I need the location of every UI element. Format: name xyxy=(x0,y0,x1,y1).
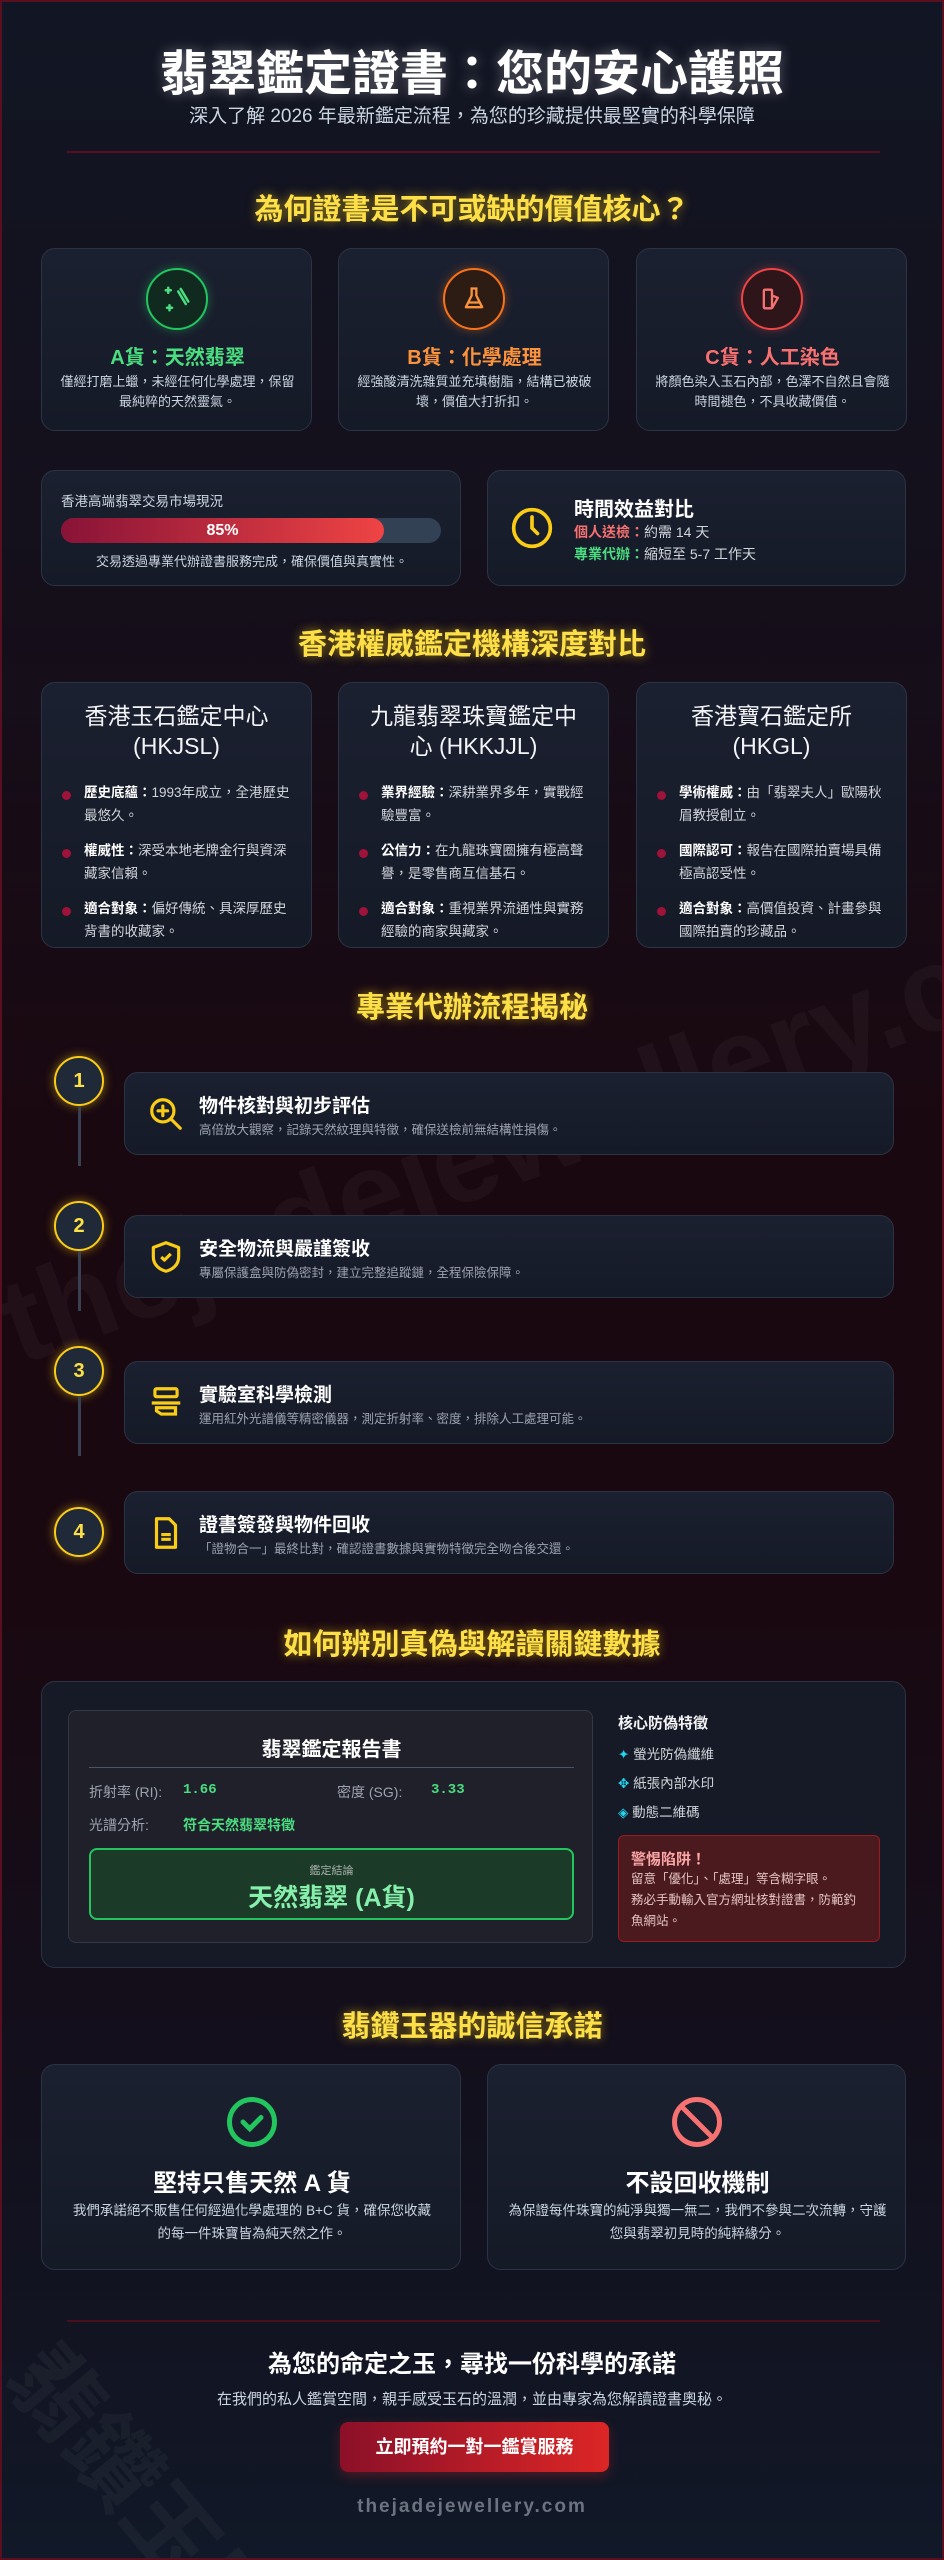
report mockup: 1.66 xyxy=(183,1782,217,1798)
panel: HKJSL: 權威性：深受本地老牌金行與資深藏家信賴。 xyxy=(84,843,286,881)
step 4: 「證物合一」最終比對，確認證書數據與實物特徵完全吻合後交還。 xyxy=(199,1542,574,1556)
CTA button xyxy=(340,2422,609,2472)
panel: time comparison: 時間效益對比 xyxy=(574,499,694,521)
panel: verification xyxy=(41,1681,906,1968)
panel: no buyback: 不設回收機制 xyxy=(626,2170,770,2197)
warning callout: 務必手動輸入官方網址核對證書，防範釣魚網站。 xyxy=(631,1893,856,1928)
panel: A grade xyxy=(41,248,312,431)
step 4: 證書簽發與物件回收 xyxy=(199,1515,370,1536)
icon: flask xyxy=(443,268,505,330)
panel: HKGL: 國際認可：報告在國際拍賣場具備極高認受性。 xyxy=(679,843,882,881)
security features: ✦ 螢光防偽纖維 xyxy=(618,1747,714,1762)
panel: market bar: 香港高端翡翠交易市場現況 xyxy=(61,494,223,509)
panel: HKGL: 適合對象：高價值投資、計畫參與國際拍賣的珍藏品。 xyxy=(679,901,882,939)
panel: C grade: 將顏色染入玉石內部，色澤不自然且會隨時間褪色，不具收藏價值。 xyxy=(655,374,890,409)
panel: A only xyxy=(41,2064,461,2270)
panel: HKJSL xyxy=(41,682,312,948)
panel: HKKJJL: 心 (HKKJJL) xyxy=(410,733,537,759)
icon: check xyxy=(227,2097,277,2147)
step 2: 專屬保護盒與防偽密封，建立完整追蹤鏈，全程保險保障。 xyxy=(199,1266,524,1280)
panel: HKGL: 學術權威：由「翡翠夫人」歐陽秋眉教授創立。 xyxy=(679,785,882,823)
panel: market bar: 交易透過專業代辦證書服務完成，確保價值與真實性。 xyxy=(96,554,408,569)
panel: time comparison: 專業代辦：縮短至 5-7 工作天 xyxy=(574,546,756,562)
panel: B grade xyxy=(338,248,609,431)
panel: HKKJJL: 公信力：在九龍珠寶圈擁有極高聲譽，是零售商互信基石。 xyxy=(381,843,584,881)
panel: A only: 我們承諾絕不販售任何經過化學處理的 B+C 貨，確保您收藏的每一件珠寶皆為純天然之作。 xyxy=(73,2203,431,2241)
icon: prohibited xyxy=(672,2097,722,2147)
panel: A grade: A貨：天然翡翠 xyxy=(110,347,245,369)
icon: sparkle xyxy=(146,268,208,330)
panel: C grade xyxy=(636,248,907,431)
footer domain: thejadejewellery.com xyxy=(357,2496,587,2517)
title: 翡翠鑑定證書：您的安心護照 xyxy=(160,48,784,101)
conclusion box: 天然翡翠 (A貨) xyxy=(248,1884,415,1912)
panel: time comparison xyxy=(487,470,906,586)
report mockup: 密度 (SG): xyxy=(337,1784,402,1800)
step 1 xyxy=(48,1050,894,1166)
panel: no buyback xyxy=(487,2064,906,2270)
panel: HKKJJL: 適合對象：重視業界流通性與實務經驗的商家與藏家。 xyxy=(381,901,584,939)
bar chart: 85% xyxy=(206,522,239,539)
panel: HKJSL: 香港玉石鑑定中心 xyxy=(84,703,268,729)
bar chart xyxy=(61,518,441,543)
step 1: 物件核對與初步評估 xyxy=(199,1096,370,1117)
warning callout xyxy=(618,1835,880,1942)
step 2: 安全物流與嚴謹簽收 xyxy=(199,1239,370,1260)
panel: HKGL xyxy=(636,682,907,948)
panel: HKGL: (HKGL) xyxy=(733,733,810,759)
heading: why certificate: 為何證書是不可或缺的價值核心？ xyxy=(254,194,690,226)
step 1: 1 xyxy=(73,1070,85,1092)
report mockup: 符合天然翡翠特徵 xyxy=(183,1817,295,1833)
panel: B grade: B貨：化學處理 xyxy=(407,347,542,369)
security features: 核心防偽特徵 xyxy=(618,1715,708,1732)
icon: clock xyxy=(512,508,552,548)
panel: A only: 堅持只售天然 A 貨 xyxy=(153,2170,351,2197)
heading: institutions: 香港權威鑑定機構深度對比 xyxy=(298,629,646,661)
CTA text: 在我們的私人鑑賞空間，親手感受玉石的溫潤，並由專家為您解讀證書奧秘。 xyxy=(217,2391,727,2408)
step 2 xyxy=(48,1195,894,1311)
step 3: 運用紅外光譜儀等精密儀器，測定折射率、密度，排除人工處理可能。 xyxy=(199,1412,587,1426)
report mockup: 光譜分析: xyxy=(89,1817,149,1833)
panel: C grade: C貨：人工染色 xyxy=(705,347,840,369)
step 1: 高倍放大觀察，記錄天然紋理與特徵，確保送檢前無結構性損傷。 xyxy=(199,1123,562,1137)
panel: time comparison: 個人送檢：約需 14 天 xyxy=(574,524,709,540)
report mockup xyxy=(68,1710,593,1943)
panel: B grade: 經強酸清洗雜質並充填樹脂，結構已被破壞，價值大打折扣。 xyxy=(357,374,592,409)
panel: HKGL: 香港寶石鑑定所 xyxy=(691,703,852,729)
warning callout: 警惕陷阱！ xyxy=(631,1851,706,1868)
conclusion box: 鑑定結論 xyxy=(310,1865,354,1877)
panel: HKKJJL: 業界經驗：深耕業界多年，實戰經驗豐富。 xyxy=(381,785,584,823)
subtitle: 深入了解 2026 年最新鑑定流程，為您的珍藏提供最堅實的科學保障 xyxy=(189,106,755,127)
security features xyxy=(618,1715,714,1820)
heading: commitment: 翡鑽玉器的誠信承諾 xyxy=(341,2011,602,2043)
security features: ◈ 動態二維碼 xyxy=(618,1805,700,1820)
step 3: 3 xyxy=(73,1360,85,1382)
security features: ✥ 紙張內部水印 xyxy=(618,1776,714,1791)
panel: HKKJJL xyxy=(338,682,609,948)
icon: palette xyxy=(741,268,803,330)
warning callout: 留意「優化」、「處理」等含糊字眼。 xyxy=(631,1872,831,1886)
step 2: 2 xyxy=(73,1214,85,1236)
heading: how to verify: 如何辨別真偽與解讀關鍵數據 xyxy=(283,1629,660,1661)
CTA heading: 為您的命定之玉，尋找一份科學的承諾 xyxy=(268,2351,676,2378)
panel: no buyback: 為保證每件珠寶的純淨與獨一無二，我們不參與二次流轉，守護您與翡翠初見時的純粹緣分。 xyxy=(508,2203,886,2241)
report mockup: 3.33 xyxy=(431,1782,465,1798)
step 4: 4 xyxy=(73,1520,85,1542)
heading: process: 專業代辦流程揭秘 xyxy=(356,992,588,1024)
report mockup: 翡翠鑑定報告書 xyxy=(262,1739,402,1761)
panel: market bar xyxy=(41,470,461,586)
panel: HKJSL: 適合對象：偏好傳統、具深厚歷史背書的收藏家。 xyxy=(84,901,286,939)
panel: HKKJJL: 九龍翡翠珠寶鑑定中 xyxy=(370,703,577,729)
step 4 xyxy=(48,1491,894,1574)
panel: HKJSL: 歷史底蘊：1993年成立，全港歷史最悠久。 xyxy=(84,785,290,823)
panel: A grade: 僅經打磨上蠟，未經任何化學處理，保留最純粹的天然靈氣。 xyxy=(60,374,294,409)
step 3 xyxy=(48,1340,894,1456)
panel: HKJSL: (HKJSL) xyxy=(133,733,220,759)
report mockup: 折射率 (RI): xyxy=(89,1784,162,1800)
CTA button: 立即預約一對一鑑賞服務 xyxy=(376,2437,574,2457)
step 3: 實驗室科學檢測 xyxy=(199,1385,332,1406)
conclusion box xyxy=(89,1848,574,1920)
